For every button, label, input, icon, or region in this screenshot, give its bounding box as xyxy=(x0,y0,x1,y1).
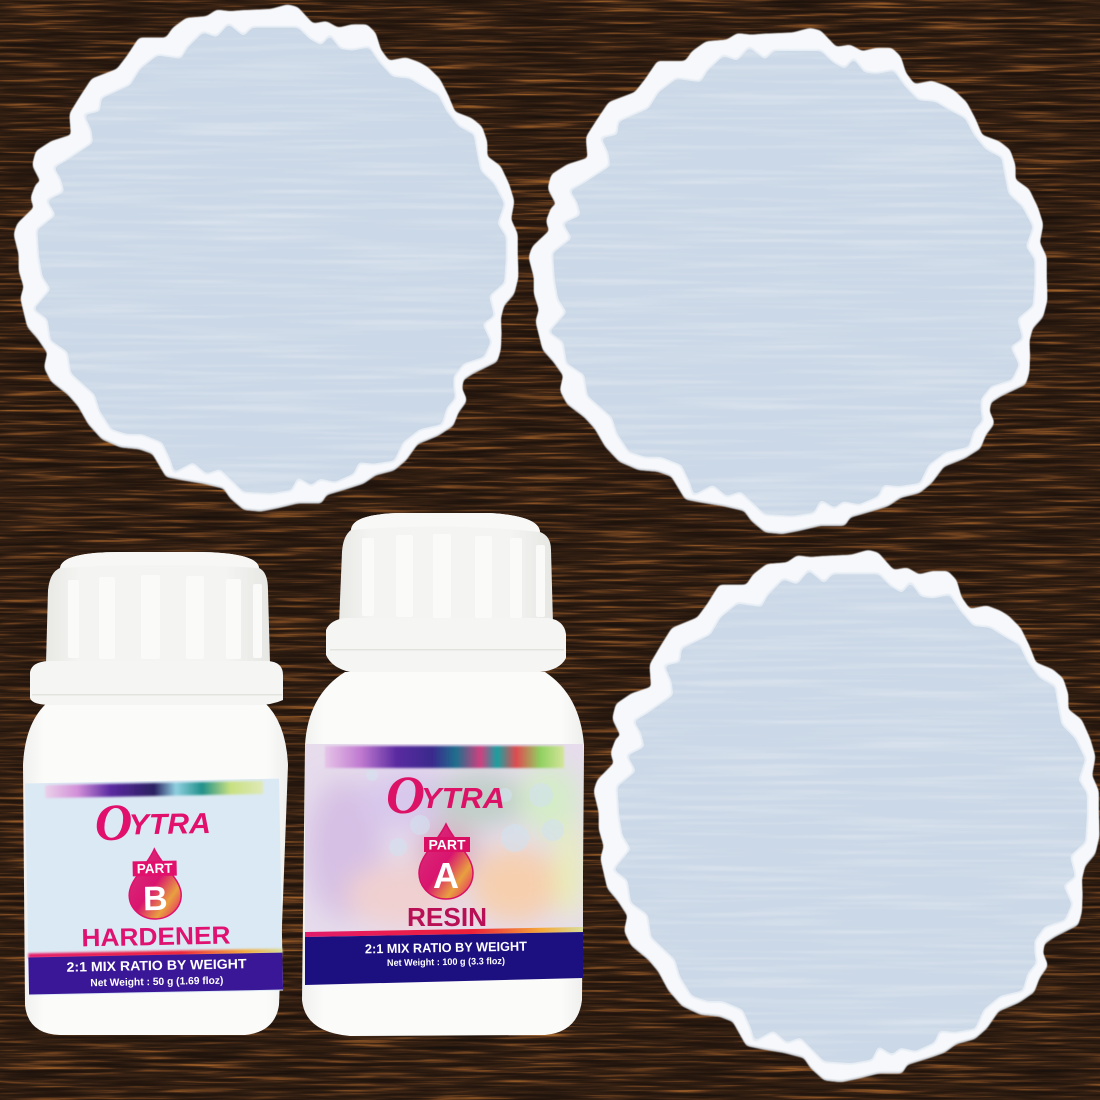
silicone mold: bottom right xyxy=(594,550,1099,1082)
bottle: part A resin xyxy=(302,513,584,1036)
drop icon: part B: PART xyxy=(137,861,173,876)
bottle: part B hardener xyxy=(23,552,288,1035)
cap: resin bottle xyxy=(326,513,566,672)
cap: hardener bottle xyxy=(30,552,283,705)
label: hardener xyxy=(25,779,283,995)
band: hardener mix ratio: 2:1 MIX RATIO BY WEIGHT xyxy=(66,956,247,975)
drop icon: part B xyxy=(128,849,182,919)
label: resin xyxy=(305,744,584,985)
logo: Oytra on resin: YTRA xyxy=(421,783,505,815)
band: resin mix ratio: Net Weight : 100 g (3.3 floz) xyxy=(387,956,505,969)
silicone mold: top right xyxy=(529,28,1047,534)
logo: Oytra on hardener: O xyxy=(94,794,133,852)
band: resin mix ratio: 2:1 MIX RATIO BY WEIGHT xyxy=(365,939,527,956)
logo: Oytra on hardener: YTRA xyxy=(129,808,211,841)
silicone mold: top left xyxy=(14,5,518,512)
product name: hardener: HARDENER xyxy=(81,922,231,952)
drop icon: part A xyxy=(419,824,473,899)
logo: Oytra on resin xyxy=(386,765,505,825)
body: resin bottle xyxy=(302,672,584,1036)
band: resin mix ratio xyxy=(305,932,583,985)
logo: Oytra on resin: O xyxy=(386,765,425,825)
band: hardener mix ratio: Net Weight : 50 g (1.69 floz) xyxy=(90,975,223,989)
drop icon: part A: PART xyxy=(428,836,466,852)
logo: Oytra on hardener xyxy=(94,793,211,852)
product name: resin: RESIN xyxy=(407,902,487,932)
body: hardener bottle xyxy=(23,702,288,1035)
drop icon: part B: B xyxy=(143,880,168,918)
band: hardener mix ratio xyxy=(28,953,283,994)
paint spots xyxy=(366,769,564,856)
colour wash: resin label xyxy=(307,764,584,927)
drop icon: part A: A xyxy=(433,855,459,896)
